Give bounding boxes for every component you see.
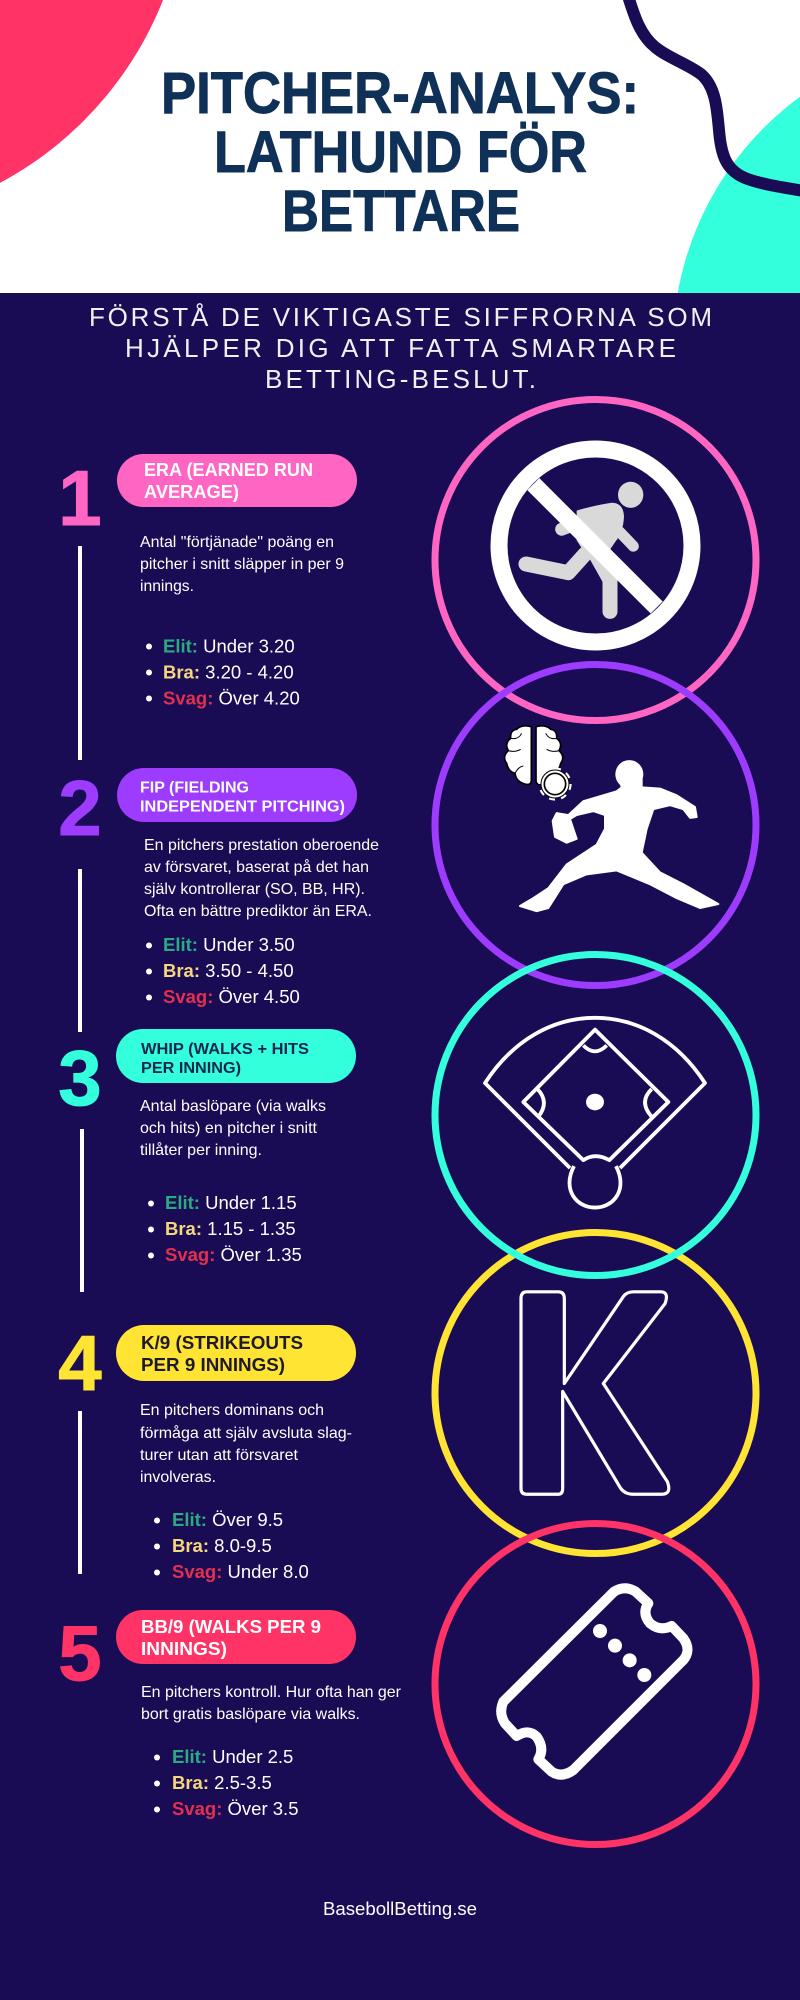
heading pill: ERA: AVERAGE) [144, 482, 239, 502]
description: FIP: själv kontrollerar (SO, BB, HR). [144, 881, 365, 898]
icon: ticket in red circle [435, 1524, 756, 1844]
title: PITCHER-ANALYS: [161, 61, 639, 126]
ratings list: WHIP: Svag: Över 1.35 [165, 1244, 302, 1265]
number 4: 4 [58, 1319, 102, 1407]
heading pill: K/9: K/9 (STRIKEOUTS [141, 1333, 303, 1353]
connector line 1 [78, 546, 82, 760]
ratings list: FIP: Elit: Under 3.50 [163, 934, 295, 955]
heading pill: FIP [117, 768, 357, 822]
ratings list: K/9: Bra: 8.0-9.5 [172, 1535, 272, 1556]
heading pill: K/9: PER 9 INNINGS) [141, 1355, 285, 1375]
ratings list: WHIP: Elit: Under 1.15 [165, 1192, 297, 1213]
heading pill: FIP: INDEPENDENT PITCHING) [140, 798, 345, 816]
description: ERA [140, 534, 344, 595]
panel: ERA [58, 454, 357, 760]
brain and gear [505, 726, 570, 799]
heading pill: ERA [117, 454, 357, 507]
title: BETTARE [282, 179, 520, 244]
number 1: 1 [58, 454, 102, 542]
ratings list: ERA: Svag: Över 4.20 [163, 688, 300, 708]
description: ERA: innings. [140, 578, 194, 595]
pitcher silhouette [520, 760, 718, 911]
description: FIP: En pitchers prestation oberoende [144, 837, 379, 854]
description: K/9 [140, 1402, 352, 1486]
icon: pitcher with brain in purple circle [435, 664, 756, 986]
heading pill: FIP: FIP (FIELDING [140, 780, 249, 796]
ratings list: FIP: Bra: 3.50 - 4.50 [163, 960, 294, 981]
description: FIP: Ofta en bättre prediktor än ERA. [144, 903, 372, 920]
description: WHIP: Antal baslöpare (via walks [140, 1098, 326, 1115]
panel: BB/9 [58, 1609, 401, 1819]
subtitle: BETTING-BESLUT. [265, 364, 536, 394]
description: WHIP: och hits) en pitcher i snitt [140, 1120, 318, 1137]
ratings list: BB/9: Svag: Över 3.5 [172, 1798, 298, 1819]
title: LATHUND FÖR [214, 120, 587, 185]
description: ERA: Antal "förtjänade" poäng en [140, 534, 334, 551]
subtitle: HJÄLPER DIG ATT FATTA SMARTARE [125, 333, 676, 363]
number 5: 5 [58, 1609, 102, 1697]
subtitle [89, 302, 712, 394]
heading pill: WHIP: PER INNING) [141, 1060, 241, 1077]
panel: FIP [58, 764, 379, 1032]
description: K/9: En pitchers dominans och [140, 1402, 324, 1419]
ratings list: BB/9: Elit: Under 2.5 [172, 1746, 293, 1767]
ratings list: K/9: Elit: Över 9.5 [172, 1509, 283, 1530]
heading pill: K/9 [116, 1325, 356, 1381]
description: ERA: pitcher i snitt släpper in per 9 [140, 556, 344, 573]
decorative squiggle [628, 0, 800, 191]
header panel [0, 0, 800, 293]
decorative teal circle [678, 96, 800, 293]
ratings list: FIP [146, 934, 300, 1007]
description: WHIP [140, 1098, 326, 1159]
number 2: 2 [58, 764, 102, 852]
heading pill: WHIP: WHIP (WALKS + HITS [141, 1041, 309, 1058]
heading pill: ERA: ERA (EARNED RUN [144, 460, 313, 480]
decorative red circle [0, 0, 163, 183]
connector line 4 [78, 1411, 82, 1574]
description: FIP [144, 837, 379, 920]
description: K/9: förmåga att själv avsluta slag- [140, 1424, 352, 1442]
panel: K/9 [58, 1319, 356, 1582]
ratings list: FIP: Svag: Över 4.50 [163, 986, 300, 1007]
description: BB/9: bort gratis baslöpare via walks. [141, 1706, 360, 1723]
description: K/9: turer utan att försvaret [140, 1447, 299, 1464]
number 3: 3 [58, 1034, 102, 1122]
heading pill: BB/9 [116, 1610, 356, 1664]
ratings list: WHIP [148, 1192, 302, 1265]
panel: WHIP [58, 1029, 356, 1292]
ratings list: WHIP: Bra: 1.15 - 1.35 [165, 1218, 296, 1239]
connector line 3 [80, 1129, 84, 1292]
ratings list: ERA: Elit: Under 3.20 [163, 636, 295, 656]
ratings list: BB/9: Bra: 2.5-3.5 [172, 1772, 272, 1793]
icon: baseball K in yellow circle [435, 1232, 756, 1554]
description: BB/9 [141, 1684, 401, 1723]
ratings list: BB/9 [154, 1746, 298, 1819]
description: FIP: av försvaret, baserat på det han [144, 858, 369, 876]
description: K/9: involveras. [140, 1469, 216, 1486]
heading pill: WHIP [116, 1029, 356, 1083]
ratings list: ERA: Bra: 3.20 - 4.20 [163, 662, 294, 682]
heading pill: BB/9: INNINGS) [141, 1639, 227, 1659]
footer: site name: BasebollBetting.se [323, 1899, 477, 1919]
connector line 2 [78, 869, 82, 1032]
ratings list: ERA [146, 636, 300, 708]
heading pill: BB/9: BB/9 (WALKS PER 9 [141, 1617, 321, 1637]
subtitle: FÖRSTÅ DE VIKTIGASTE SIFFRORNA SOM [89, 302, 712, 332]
ratings list: K/9 [154, 1509, 309, 1582]
ratings list: K/9: Svag: Under 8.0 [172, 1561, 309, 1582]
description: WHIP: tillåter per inning. [140, 1141, 262, 1159]
description: BB/9: En pitchers kontroll. Hur ofta han ger [141, 1684, 401, 1701]
title [161, 61, 639, 244]
icon: baseball diamond in teal circle [435, 954, 756, 1276]
icon: no running sign in pink circle [435, 400, 756, 720]
